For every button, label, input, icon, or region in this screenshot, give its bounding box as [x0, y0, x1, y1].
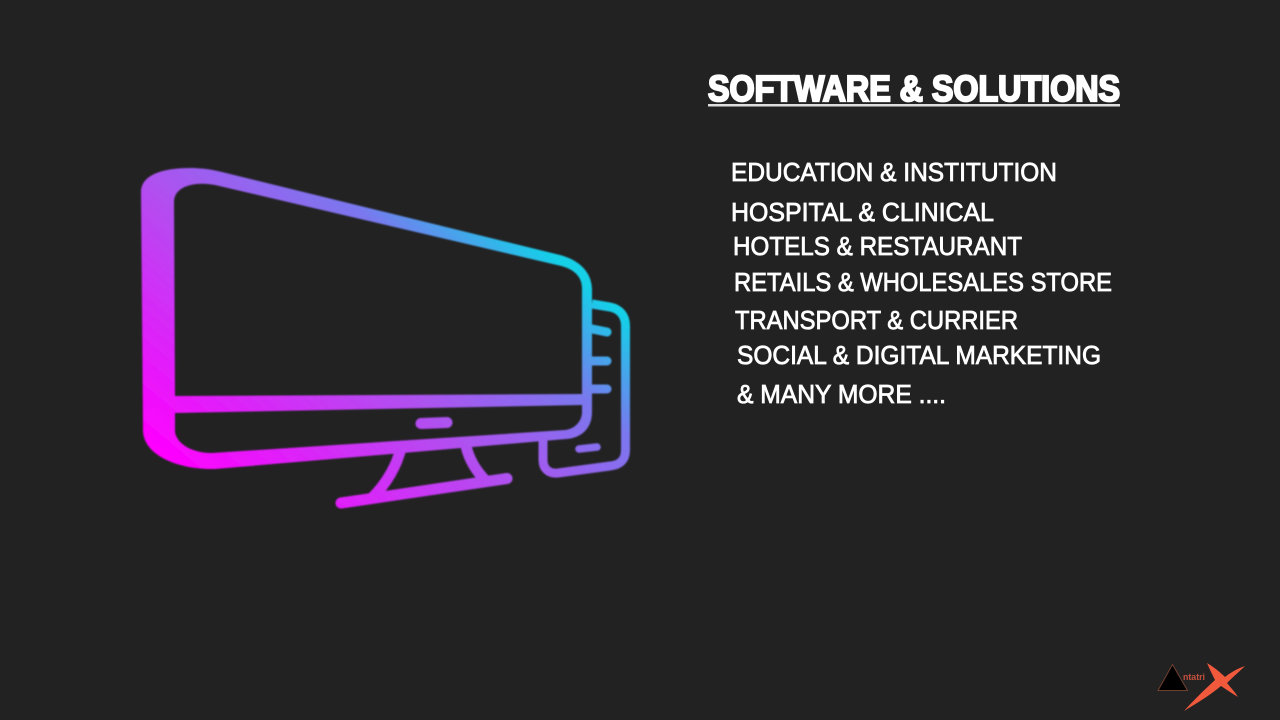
list of solutions: [731, 157, 1112, 409]
item: education: EDUCATION & INSTITUTION: [731, 157, 1057, 187]
item: marketing: SOCIAL & DIGITAL MARKETING: [737, 340, 1101, 370]
tower button: [579, 447, 597, 449]
icon: desktop computer: [141, 168, 626, 503]
item: transport: TRANSPORT & CURRIER: [735, 305, 1018, 335]
item: hotels: HOTELS & RESTAURANT: [733, 231, 1022, 261]
monitor button: [421, 422, 447, 424]
tower vents: [592, 329, 607, 389]
logo text: ntatri: [1183, 672, 1205, 683]
logo triangle: [1158, 664, 1188, 690]
logo: AntatriX: [1158, 663, 1245, 711]
monitor frame: [141, 168, 592, 469]
item: many more: & MANY MORE ....: [737, 379, 946, 409]
tower case: [543, 304, 626, 473]
title: SOFTWARE & SOLUTIONS: [708, 68, 1120, 109]
stand: [341, 478, 507, 503]
item: retails: RETAILS & WHOLESALES STORE: [734, 267, 1112, 297]
item: hospital: HOSPITAL & CLINICAL: [731, 197, 994, 227]
logo X mark: [1184, 663, 1245, 711]
